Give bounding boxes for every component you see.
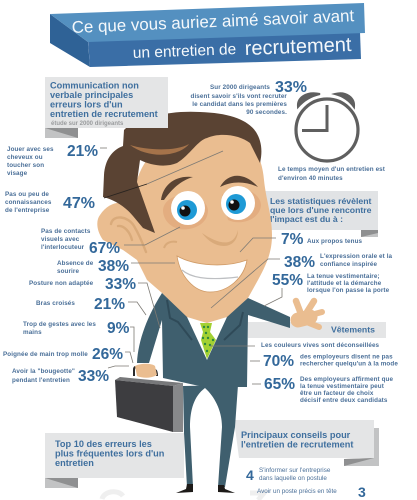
- panel: statistiques: [263, 191, 378, 237]
- tips list: [246, 467, 366, 500]
- right stat: 70%: rechercher quelqu'un à la mode: [300, 360, 398, 368]
- left stat: 67% contact visuel: Pas de contacts: [41, 228, 91, 235]
- left stat: 26% poignée de main: 26%: [92, 346, 123, 363]
- left stat: 47% entreprise: 47%: [63, 195, 95, 212]
- left stat: 26% poignée de main: [3, 346, 123, 363]
- panel: communication non verbale: verbale principales: [50, 90, 133, 100]
- lapels: [167, 300, 243, 340]
- tips list: 4: [246, 467, 254, 483]
- jacket and left arm: [137, 293, 290, 387]
- panel: statistiques: l'impact est du à :: [270, 214, 343, 224]
- panel: statistiques: que lors d'une rencontre: [270, 205, 372, 215]
- nose: [202, 230, 238, 246]
- left stat: 67% contact visuel: visuels avec: [41, 236, 80, 243]
- right stat: 38%: [284, 253, 393, 271]
- panel: principaux conseils: l'entretien de recrutement: [241, 440, 353, 450]
- right stat: 65%: décisif entre deux candidats: [300, 397, 388, 404]
- mouth: [177, 256, 247, 292]
- left stat: 9% gestes: Trop de gestes avec les: [23, 321, 96, 328]
- left eye: [171, 191, 205, 225]
- left stat: 38% sourire: [57, 258, 129, 275]
- title banner: Ce que vous auriez aimé savoir avant: [71, 6, 355, 37]
- left stat: 9% gestes: [23, 320, 130, 337]
- left stat: 38% sourire: Absence de: [57, 260, 94, 267]
- text: temps moyen: [278, 166, 386, 182]
- left stat: 67% contact visuel: 67%: [89, 240, 120, 257]
- left stat: 33% posture: Posture non adaptée: [29, 280, 94, 287]
- right hand: [296, 301, 322, 327]
- left stat: 38% sourire: sourire: [57, 268, 79, 275]
- left stat: 33% posture: 33%: [105, 276, 136, 293]
- left stat: 33% bougeotte: Avoir la "bougeotte": [12, 368, 75, 375]
- tips list: dans laquelle on postule: [259, 475, 327, 482]
- right stat: 55%: l'attitude et la démarche: [307, 280, 382, 287]
- hair: [103, 112, 261, 233]
- tips list: S'informer sur l'entreprise: [259, 467, 331, 474]
- right stat: 70%: des employeurs disent ne pas: [300, 354, 393, 360]
- left stat: 21% cheveux: [7, 143, 98, 177]
- left stat: 21% cheveux: toucher son: [7, 162, 44, 169]
- left stat: 21% cheveux: cheveux ou: [7, 154, 43, 161]
- left stat: 9% gestes: 9%: [107, 320, 130, 337]
- left stat: 21% cheveux: visage: [7, 170, 28, 177]
- left stat: 33% bougeotte: pendant l'entretien: [12, 377, 70, 384]
- stat: 33% des dirigeants: disent savoir s'ils vont recruter: [190, 93, 287, 100]
- tie: [200, 323, 216, 359]
- icon: alarm clock: [296, 93, 358, 161]
- smile crease: [164, 242, 177, 248]
- right stat: 65%: Des employeurs affirment que: [300, 376, 393, 383]
- left stat: 9% gestes: mains: [23, 329, 42, 336]
- left stat: 21% bras croisés: Bras croisés: [36, 300, 75, 307]
- clothing note: Les couleurs vives sont déconseillées: [261, 342, 380, 349]
- right stat: 55%: 55%: [272, 272, 303, 289]
- right stat: 65%: 65%: [264, 376, 295, 393]
- left hand: [135, 364, 157, 378]
- panel: communication non verbale: erreurs lors d'un: [50, 100, 123, 110]
- title banner: un entretien de: [133, 41, 236, 62]
- text: temps moyen: Le temps moyen d'un entretien est: [278, 166, 386, 173]
- right stat: 70%: 70%: [263, 353, 294, 370]
- panel: communication non verbale: Communication non: [50, 80, 139, 90]
- left stat: 47% entreprise: [5, 191, 95, 214]
- right stat: 7%: 7%: [281, 231, 304, 248]
- leader lines: [100, 148, 282, 384]
- left stat: 38% sourire: 38%: [98, 258, 129, 275]
- panel: principaux conseils: Principaux conseils pour: [241, 430, 351, 440]
- left stat: 33% bougeotte: 33%: [78, 368, 109, 385]
- panel: vêtements: [248, 322, 386, 338]
- stat: 33% des dirigeants: [190, 79, 307, 116]
- eyebrows: [161, 176, 258, 200]
- right stat: 7%: [281, 231, 363, 248]
- right stat: 65%: être un facteur de choix: [300, 390, 374, 397]
- left stat: 47% entreprise: connaissances: [5, 199, 52, 206]
- panel: communication non verbale: étude sur 2000 dirigeants: [51, 121, 124, 127]
- right stat: 55%: lorsque l'on passe la porte: [307, 287, 390, 294]
- right stat: 70%: [263, 353, 398, 370]
- left stat: 21% cheveux: Jouer avec ses: [7, 146, 54, 153]
- panel: top 10: entretien: [55, 458, 94, 468]
- stat: 33% des dirigeants: 90 secondes.: [246, 109, 287, 116]
- shirt: [187, 317, 227, 358]
- left stat: 26% poignée de main: Poignée de main trop molle: [3, 351, 88, 358]
- left stat: 33% bougeotte: [12, 368, 109, 385]
- right stat: 65%: la tenue vestimentaire peut: [300, 383, 385, 390]
- right stat: 55%: [272, 272, 390, 294]
- trousers: [183, 385, 238, 487]
- briefcase: [115, 367, 183, 432]
- title banner: recrutement: [244, 34, 352, 60]
- right stat: 38%: L'expression orale et la: [320, 253, 393, 260]
- panel: statistiques: Les statistiques révèlent: [270, 196, 372, 206]
- panel: vêtements: Vêtements: [331, 324, 375, 334]
- cheek shading: [163, 188, 261, 229]
- panel: principaux conseils: [234, 420, 379, 466]
- skin: head and neck: [97, 127, 272, 324]
- stat: 33% des dirigeants: Sur 2000 dirigeants: [210, 84, 270, 91]
- right stat: 7%: Aux propos tenus: [307, 238, 363, 245]
- panel: top 10: Top 10 des erreurs les: [55, 439, 152, 449]
- left stat: 67% contact visuel: l'interlocuteur: [41, 244, 85, 251]
- left stat: 47% entreprise: Pas ou peu de: [5, 191, 49, 198]
- stat: 33% des dirigeants: 33%: [275, 79, 307, 96]
- stat: 33% des dirigeants: le candidat dans les premières: [192, 101, 287, 108]
- title banner: [50, 3, 365, 67]
- left stat: 47% entreprise: de l'entreprise: [5, 207, 50, 214]
- tips list: Avoir un poste précis en tête: [257, 488, 337, 495]
- right eye: [221, 186, 255, 220]
- right stat: 65%: [264, 376, 393, 404]
- panel: communication non verbale: entretien de recrutement: [50, 109, 158, 119]
- right stat: 38%: 38%: [284, 254, 315, 271]
- left stat: 67% contact visuel: [41, 228, 120, 257]
- tips list: 3: [358, 484, 366, 500]
- right stat: 38%: confiance inspirée: [320, 261, 377, 268]
- panel: communication non verbale: [45, 77, 168, 138]
- panel: top 10: [45, 433, 184, 488]
- text: temps moyen: d'environ 40 minutes: [278, 175, 343, 182]
- left stat: 21% bras croisés: [36, 296, 125, 313]
- right stat: 55%: La tenue vestimentaire;: [307, 273, 380, 280]
- ear detail: [111, 217, 146, 252]
- panel: top 10: plus fréquentes lors d'un: [55, 448, 165, 458]
- left stat: 21% bras croisés: 21%: [94, 296, 125, 313]
- hair highlight: [130, 144, 189, 155]
- shoes: [176, 484, 235, 493]
- illustration: businessman: [97, 112, 322, 493]
- left stat: 33% posture: [29, 276, 136, 293]
- left stat: 21% cheveux: 21%: [67, 143, 98, 160]
